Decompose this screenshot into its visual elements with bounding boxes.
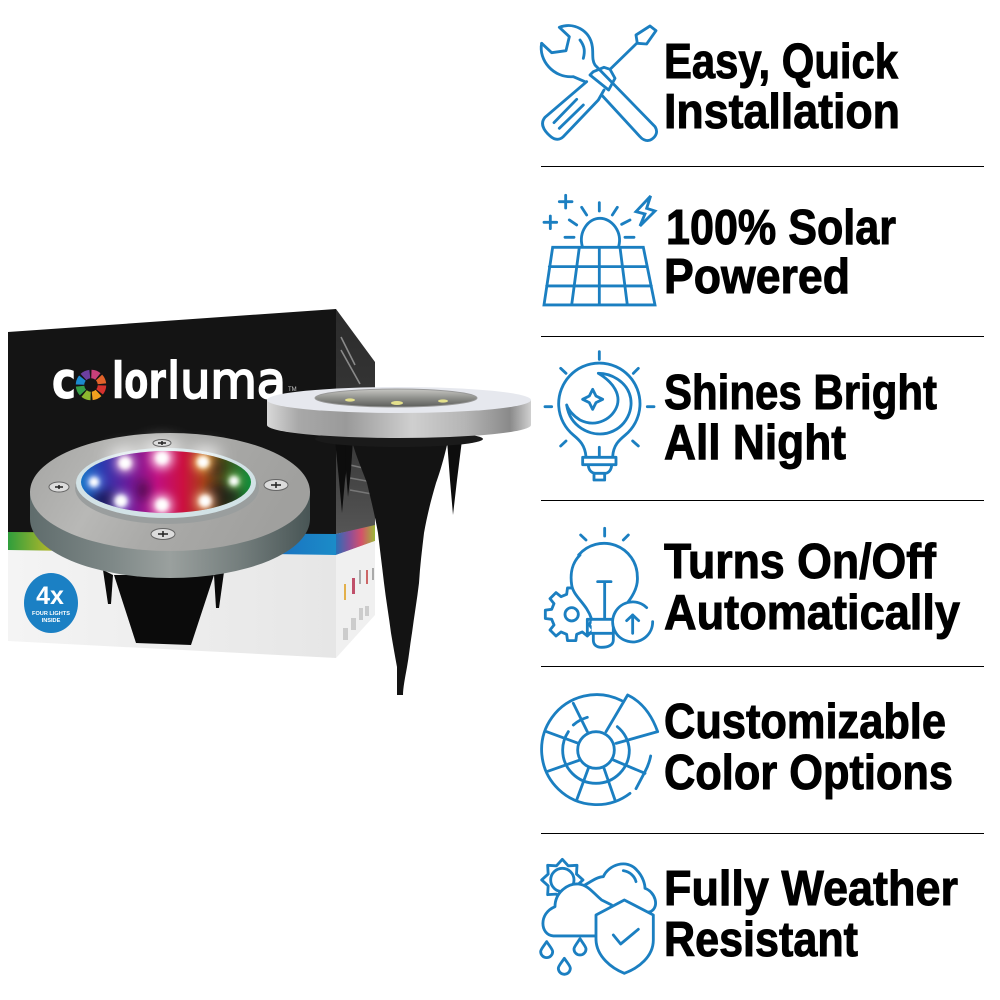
feature: easy quick installation: Installation xyxy=(664,85,900,139)
logo: c xyxy=(52,352,76,410)
feature: solar powered xyxy=(664,201,896,304)
solar glass xyxy=(315,389,477,407)
box front black panel xyxy=(8,309,336,535)
feature: easy quick installation xyxy=(664,35,900,139)
circular arrow xyxy=(613,602,653,642)
lamp metal top xyxy=(30,433,310,551)
badge: 4x four lights inside xyxy=(24,573,78,633)
icon: weather and shield xyxy=(541,859,656,974)
standalone stake light xyxy=(267,387,531,695)
logo colour wheel xyxy=(75,369,107,401)
glass LEDs xyxy=(345,398,448,405)
logo xyxy=(52,352,297,410)
feature: solar powered: Powered xyxy=(664,250,850,304)
bulb base and filament xyxy=(587,582,613,647)
feature: turns on off: Automatically xyxy=(664,586,960,640)
lamp screws xyxy=(49,440,288,540)
gear xyxy=(545,588,598,641)
logo: luma xyxy=(167,352,286,410)
feature: weather resistant: Resistant xyxy=(664,913,858,967)
box side feature marks xyxy=(343,568,374,640)
lamp glow on metal xyxy=(109,441,221,467)
badge: 4x four lights inside: INSIDE xyxy=(42,618,61,624)
feature: solar powered: 100% Solar xyxy=(666,201,896,255)
check mark xyxy=(613,929,638,944)
badge: 4x four lights inside: FOUR LIGHTS xyxy=(32,611,70,617)
feature: turns on off: Turns On/Off xyxy=(664,535,937,589)
lamp window shadow xyxy=(75,452,259,524)
feature: easy quick installation: Easy, Quick xyxy=(664,35,899,89)
cloud highlight xyxy=(623,871,636,882)
LED cores xyxy=(89,452,239,511)
feature: customizable colors: Customizable xyxy=(664,695,946,749)
icon: colour wheel xyxy=(542,695,658,805)
lamp coloured window xyxy=(81,451,251,513)
bulb fill xyxy=(571,544,637,648)
icon: bulb with gear and arrow xyxy=(545,528,653,648)
lamp window shading and LEDs xyxy=(87,447,240,515)
shield xyxy=(596,900,653,973)
LED glow xyxy=(87,447,240,515)
rays xyxy=(581,528,628,540)
lamp window ring xyxy=(76,448,256,518)
lamp rim xyxy=(30,491,310,578)
icon: wrench and screwdriver xyxy=(541,26,657,141)
box side dark panel xyxy=(336,309,375,534)
logo: TM xyxy=(288,387,297,393)
disc underside xyxy=(315,431,483,447)
icon: moon in bulb xyxy=(545,352,654,480)
feature: shines bright: Shines Bright xyxy=(664,366,937,420)
dividers xyxy=(541,166,984,834)
bulb outline xyxy=(571,543,637,619)
icon: solar panel xyxy=(544,195,655,305)
right cloud xyxy=(585,864,656,913)
left cloud xyxy=(543,884,612,936)
dark shading xyxy=(91,462,240,510)
feature: shines bright xyxy=(664,366,937,470)
feature: shines bright: All Night xyxy=(664,416,846,470)
box side white panel xyxy=(336,541,375,658)
box side rainbow band xyxy=(336,525,375,555)
logo: lor xyxy=(112,352,166,410)
box front white panel xyxy=(8,550,336,658)
lamp stake xyxy=(103,570,224,645)
feature: turns on off xyxy=(664,535,960,640)
feature: weather resistant: Fully Weather xyxy=(664,862,958,916)
small spikes xyxy=(335,440,462,515)
sun xyxy=(542,859,583,901)
box side small text lines xyxy=(341,337,372,494)
feature: customizable colors xyxy=(664,695,953,800)
box rainbow band xyxy=(8,532,336,555)
feature: customizable colors: Color Options xyxy=(664,746,953,800)
rain drops xyxy=(541,939,586,974)
product box xyxy=(8,309,375,658)
badge: 4x four lights inside: 4x xyxy=(36,582,64,610)
disc top xyxy=(267,387,531,413)
disc rim xyxy=(267,400,531,438)
arrow ring xyxy=(613,602,653,642)
lit lamp on box xyxy=(30,433,310,645)
main spike xyxy=(353,445,447,695)
feature: weather resistant xyxy=(664,862,958,967)
